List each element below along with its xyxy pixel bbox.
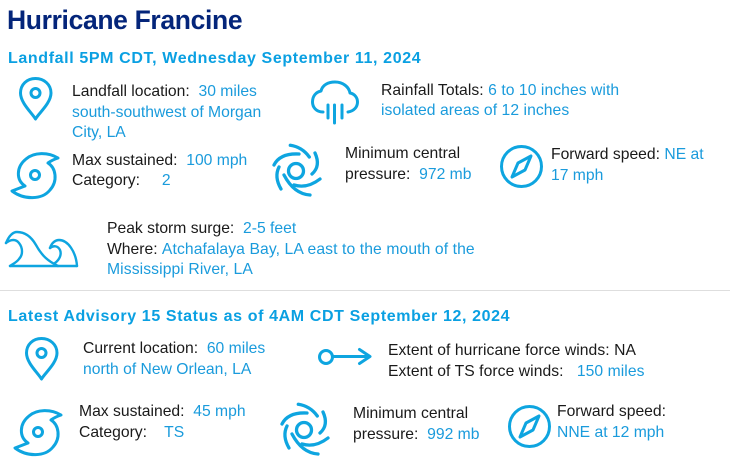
icon: current location pin — [25, 337, 58, 381]
icon: pressure swirl — [272, 144, 322, 197]
heading: landfall: Landfall 5PM CDT, Wednesday September 11, 2024 — [8, 50, 421, 67]
icon: rain cloud — [311, 80, 359, 124]
icon: hurricane symbol current — [13, 409, 62, 456]
text: max sustained and category: Max sustained: 100 mph Category: 2 — [72, 152, 247, 189]
text: current forward speed: Forward speed: NNE at 12 mph — [557, 403, 666, 440]
text: forward speed: Forward speed: NE at 17 mph — [551, 146, 704, 184]
icon: current pressure swirl — [280, 402, 330, 456]
text: wind extent: Extent of hurricane force winds: NA Extent of TS force winds: 150 miles — [388, 342, 645, 380]
text: minimum central pressure: Minimum central pressure: 972 mb — [345, 145, 471, 182]
icon: wind extent arrow — [318, 348, 372, 366]
icon: storm surge wave — [4, 230, 78, 268]
icon: hurricane symbol — [10, 152, 60, 200]
heading: latest advisory: Latest Advisory 15 Status as of 4AM CDT September 12, 2024 — [8, 308, 510, 325]
icon: compass — [500, 145, 543, 188]
text: landfall location: Landfall location: 30 miles south-southwest of Morgan City, LA — [72, 83, 261, 141]
text: peak storm surge: Peak storm surge: 2-5 feet Where: Atchafalaya Bay, LA east to the mouth of the Mississippi River, LA — [107, 220, 475, 278]
divider — [0, 290, 730, 291]
text: current minimum central pressure: Minimum central pressure: 992 mb — [353, 405, 479, 442]
text: current location: Current location: 60 miles north of New Orlean, LA — [83, 340, 265, 378]
icon: current compass — [508, 405, 551, 448]
text: rainfall totals: Rainfall Totals: 6 to 10 inches with isolated areas of 12 inches — [381, 82, 619, 119]
text: current max sustained and category: Max sustained: 45 mph Category: TS — [79, 403, 246, 440]
title: Hurricane Francine — [7, 5, 242, 35]
icon: landfall location pin — [19, 77, 52, 121]
